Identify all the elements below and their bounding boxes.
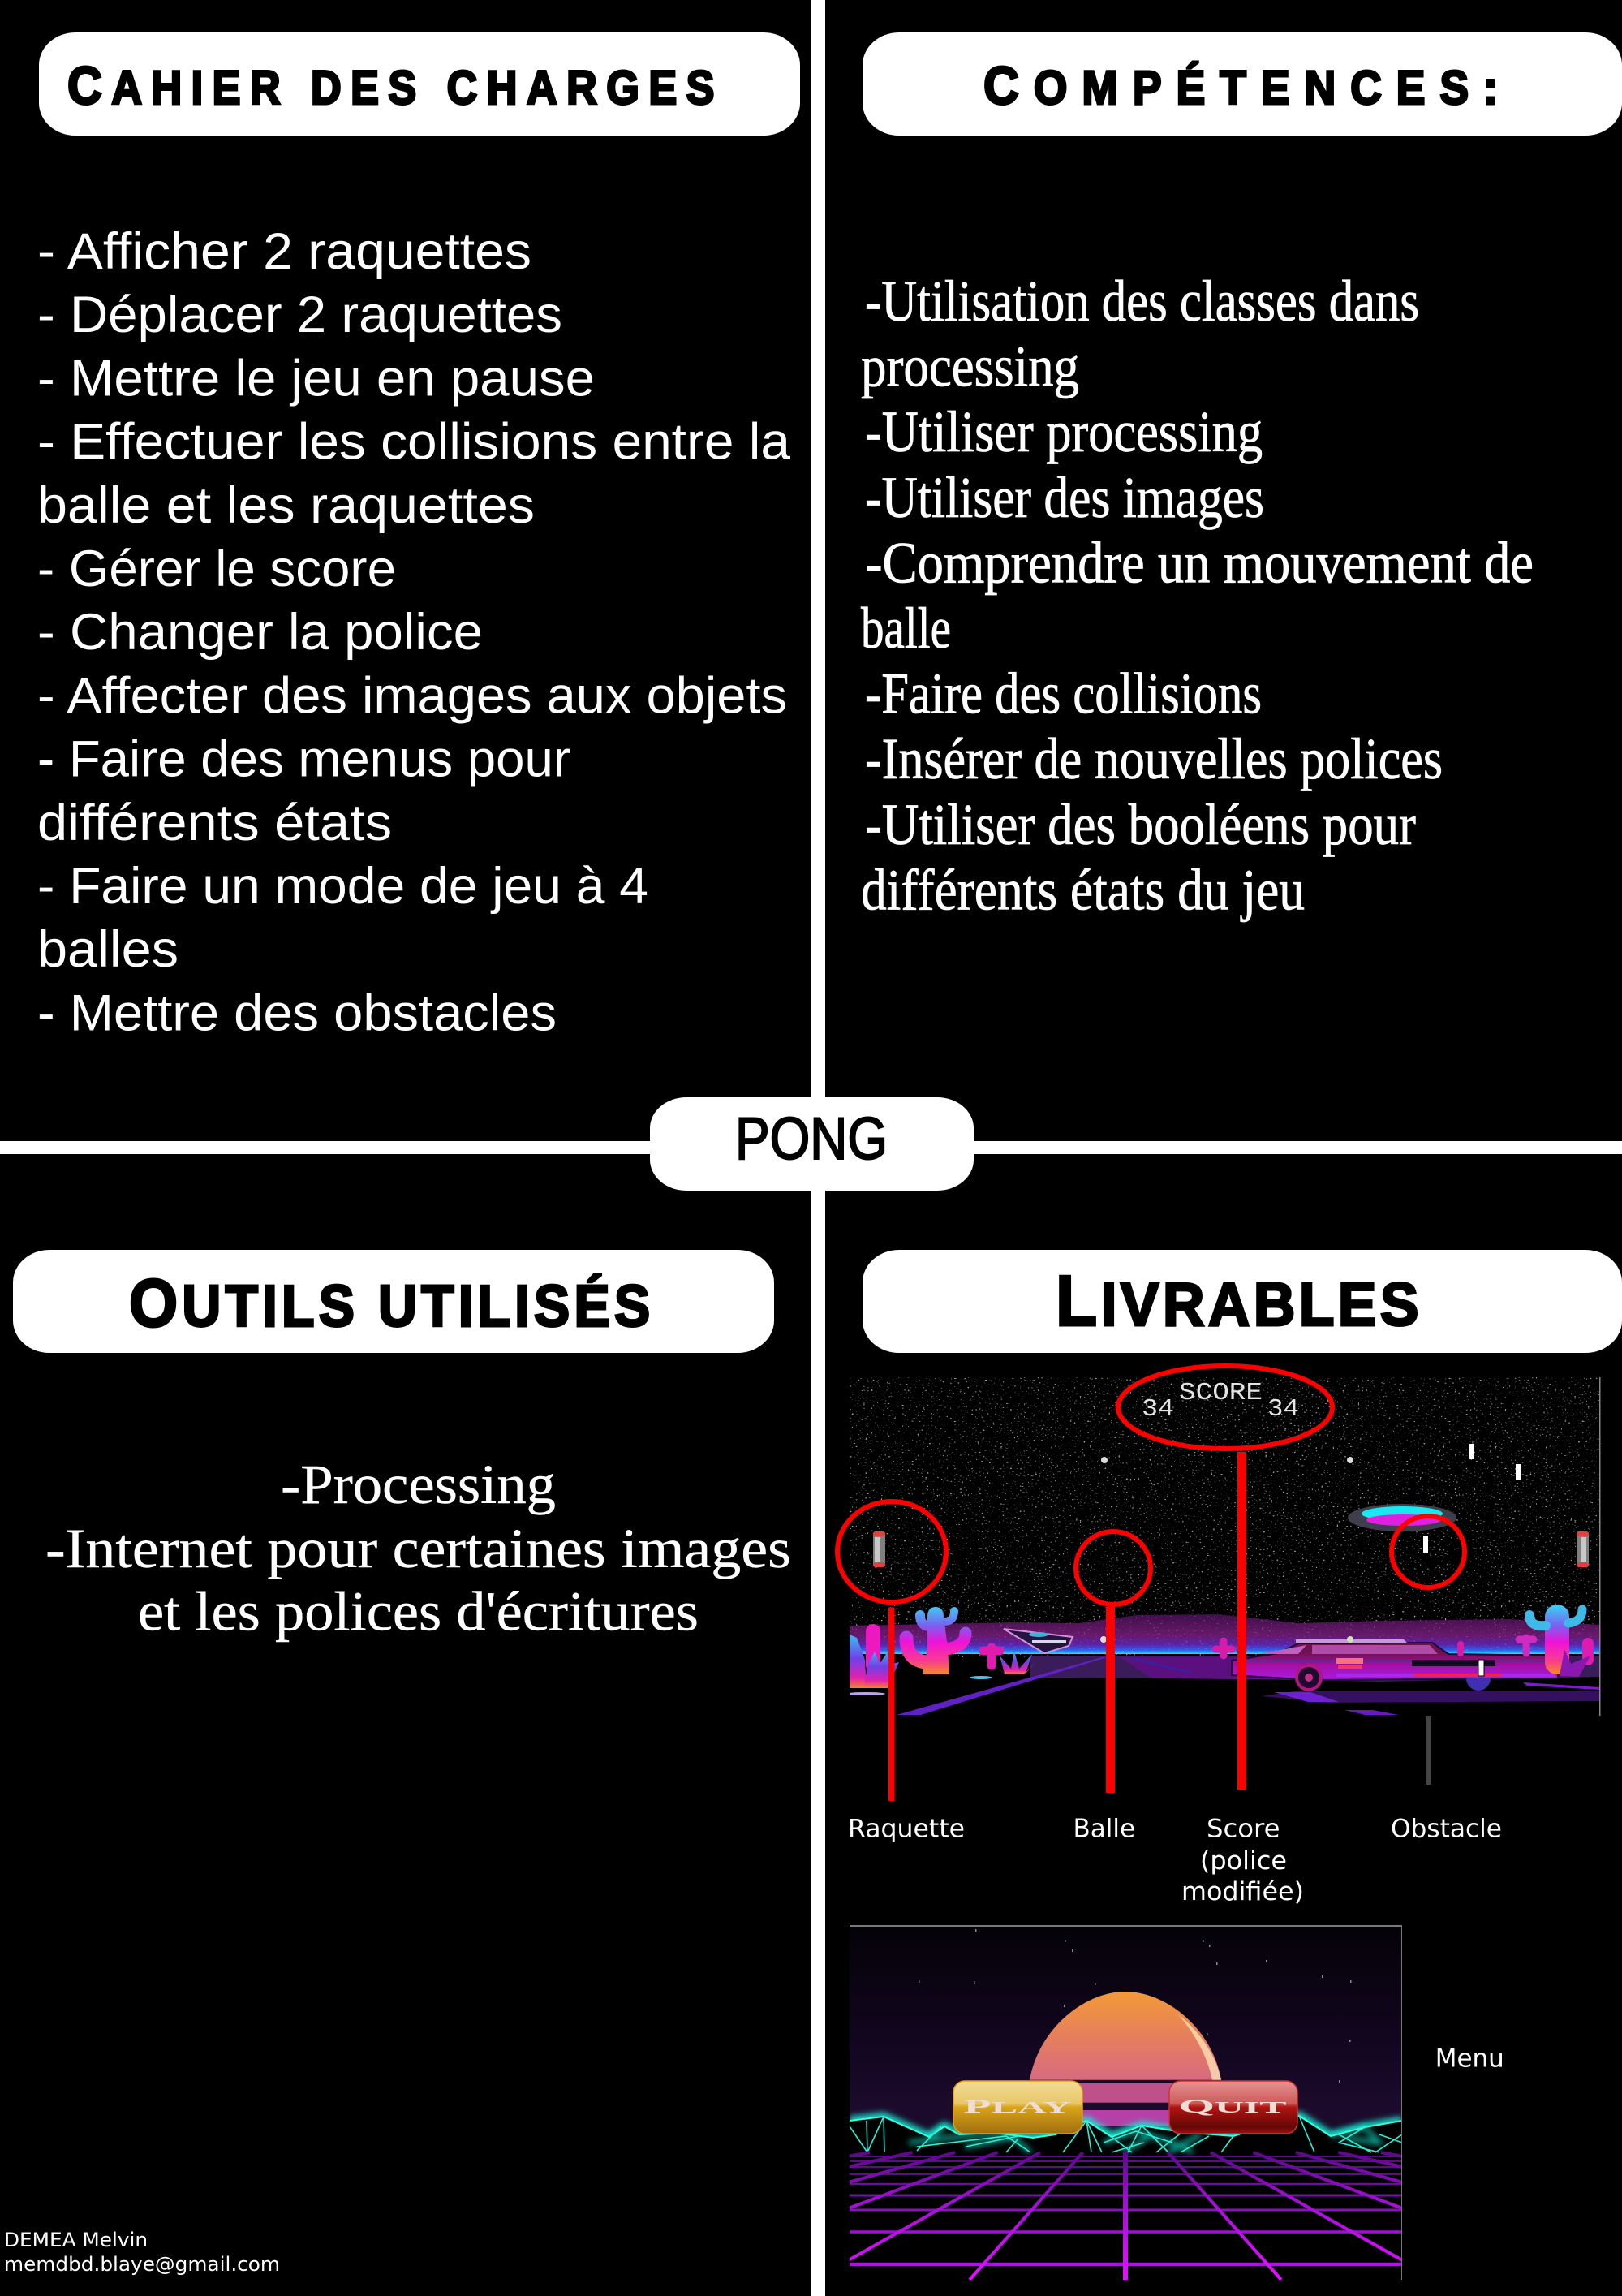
label: obstacle: Obstacle	[1391, 1815, 1502, 1844]
callout: obstacle circle and line	[1392, 1516, 1465, 1785]
neon mountains	[850, 2116, 1402, 2152]
label: raquette: Raquette	[848, 1815, 965, 1844]
credits: memdbd.blaye@gmail.com	[4, 2253, 280, 2276]
heading: compétences: C OMPÉTENCES:	[983, 57, 1498, 116]
text block: tools	[45, 1454, 791, 1642]
text block: skills list: -Utilisation des classes dans	[865, 269, 1419, 334]
text block: skills list: -Utiliser des booléens pour	[865, 792, 1416, 857]
text block: skills list	[861, 269, 1534, 922]
text block: requirements list	[37, 223, 791, 1041]
heading: cahier des charges	[39, 32, 800, 136]
ufo	[1348, 1504, 1456, 1531]
score text: 34	[1142, 1395, 1174, 1424]
label: score: Score	[1207, 1815, 1280, 1844]
text block: skills list: -Insérer de nouvelles polices	[865, 726, 1443, 791]
text block: requirements list: - Affecter des images aux objets	[37, 667, 787, 724]
title: PONG: PONG	[735, 1106, 888, 1172]
text block: requirements list: - Changer la police	[37, 604, 483, 661]
quit button: Q UIT	[1178, 2096, 1288, 2117]
obstacles	[1423, 1444, 1521, 1676]
panel: compétences	[861, 32, 1622, 922]
menu screenshot	[191, 1926, 1622, 2280]
balls	[1100, 1457, 1353, 1643]
play button: P LAY	[964, 2096, 1072, 2117]
callout: score circle and line	[1118, 1366, 1332, 1790]
panel: cahier des charges	[37, 32, 800, 1041]
cacti left	[846, 1607, 1036, 1695]
text block: skills list: processing	[861, 334, 1079, 399]
game screenshot	[846, 1377, 1600, 1716]
credits: DEMEA Melvin	[4, 2229, 148, 2251]
heading: livrables: LIVRABLES	[1056, 1261, 1418, 1341]
heading: cahier des charges: CAHIER DES CHARGES	[67, 56, 714, 116]
callout: raquette circle and line	[837, 1501, 946, 1801]
panel: outils utilisés	[13, 1250, 791, 1642]
text block: skills list: balle	[861, 596, 951, 661]
text block: skills list: différents états du jeu	[861, 857, 1305, 922]
star field	[850, 1377, 1600, 1657]
text block: skills list: -Utiliser processing	[865, 399, 1263, 464]
text block: requirements list: - Déplacer 2 raquettes	[37, 286, 562, 343]
desert horizon band	[850, 1614, 1600, 1654]
paddles	[873, 1531, 1589, 1567]
text block: requirements list: différents états	[37, 795, 392, 851]
score text: 34	[1267, 1395, 1299, 1424]
heading: livrables	[863, 1250, 1622, 1353]
car	[1232, 1639, 1558, 1691]
label: score	[1181, 1815, 1304, 1906]
sun	[1030, 1992, 1221, 2126]
motel sign	[1004, 1629, 1073, 1653]
text block: requirements list: balles	[37, 921, 179, 978]
text block: tools: -Processing	[281, 1454, 556, 1515]
credits	[4, 2229, 280, 2276]
label: menu: Menu	[1435, 2044, 1504, 2074]
text block: skills list: -Comprendre un mouvement de	[865, 530, 1534, 595]
text block: requirements list: - Faire des menus pour	[37, 731, 570, 788]
text block: tools: -Internet pour certaines images	[45, 1518, 791, 1579]
sky stars	[919, 1929, 1352, 2083]
title: PONG	[650, 1097, 974, 1191]
label: score: modifiée)	[1181, 1877, 1304, 1906]
text block: skills list: -Utiliser des images	[865, 465, 1264, 530]
heading: outils utilisés	[13, 1250, 774, 1353]
text block: requirements list: - Faire un mode de jeu à 4	[37, 858, 648, 915]
text block: skills list: -Faire des collisions	[865, 661, 1262, 726]
text block: requirements list: - Mettre des obstacles	[37, 984, 557, 1041]
text block: requirements list: balle et les raquettes	[37, 477, 535, 534]
road and ground	[897, 1656, 1600, 1715]
text block: tools: et les polices d'écritures	[138, 1580, 699, 1642]
cacti right	[1215, 1609, 1590, 1677]
label: balle: Balle	[1073, 1815, 1135, 1844]
text block: requirements list: - Effectuer les collisions entre la	[37, 414, 791, 471]
quit button	[1169, 2081, 1297, 2134]
neon grid	[191, 2152, 1622, 2280]
panel: livrables	[835, 1250, 1622, 2280]
text block: requirements list: - Afficher 2 raquettes	[37, 223, 531, 280]
callout: balle circle and line	[1076, 1531, 1151, 1793]
play button	[953, 2081, 1082, 2134]
score text: SCORE	[1179, 1379, 1263, 1407]
heading: outils utilisés: OUTILS UTILISÉS	[129, 1265, 650, 1342]
label: score: (police	[1200, 1846, 1287, 1876]
score text	[1142, 1379, 1299, 1424]
text block: requirements list: - Gérer le score	[37, 541, 396, 597]
heading: compétences	[863, 32, 1622, 136]
text block: requirements list: - Mettre le jeu en pause	[37, 350, 595, 407]
